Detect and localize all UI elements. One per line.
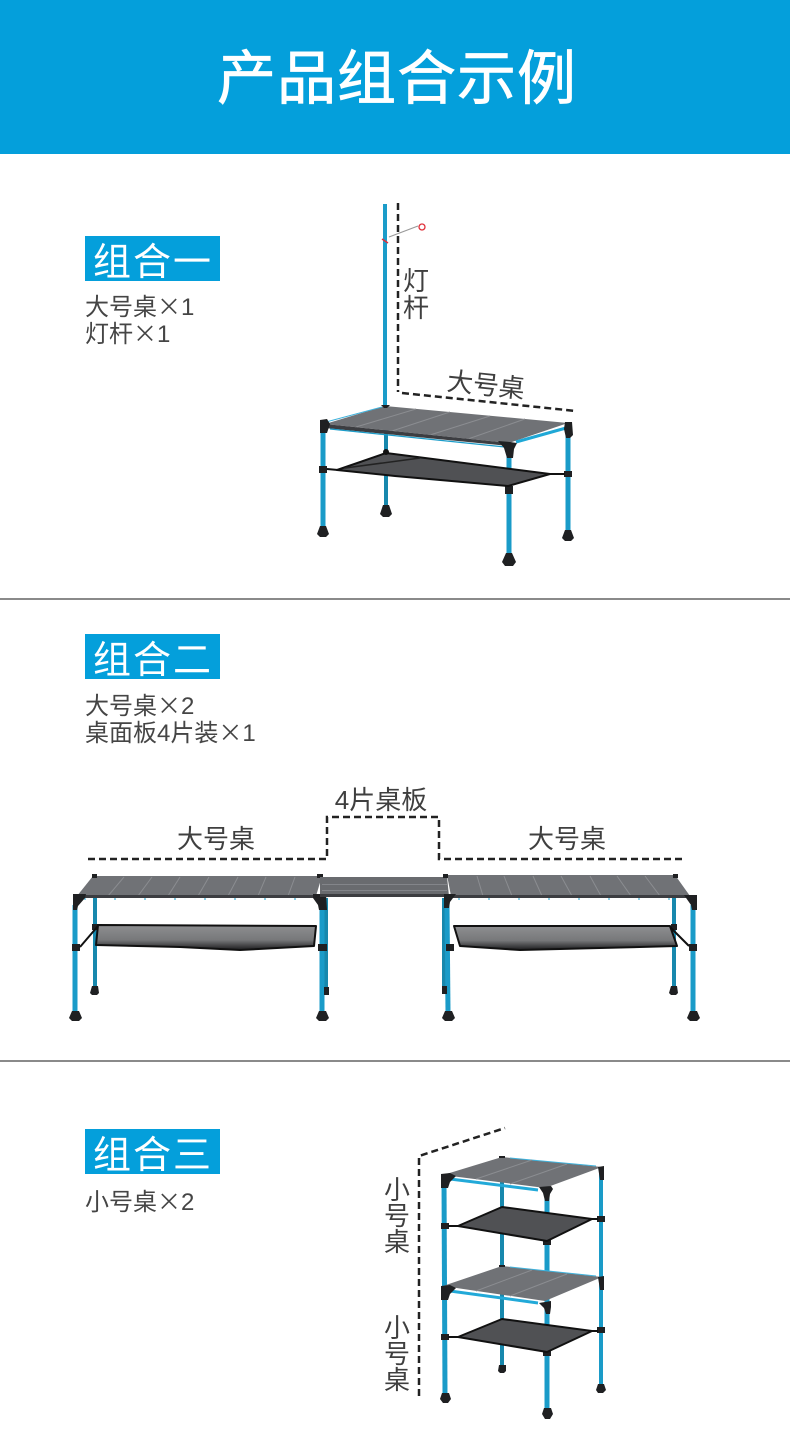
divider bbox=[0, 598, 790, 600]
dimension label: upper small table: 号 bbox=[384, 1201, 410, 1231]
table top bbox=[320, 405, 573, 458]
badge: combination one: 组合一 bbox=[93, 242, 213, 284]
dimension line: table bbox=[402, 393, 576, 411]
parts list: combination three: 小号桌 bbox=[85, 1189, 157, 1216]
lower table top bbox=[441, 1265, 604, 1314]
dimension label: pole: 杆 bbox=[403, 293, 429, 323]
title: 产品组合示例 bbox=[217, 46, 577, 112]
badge: combination two: 组合二 bbox=[93, 640, 213, 682]
parts list: combination two: 桌面板4片装 bbox=[85, 720, 218, 747]
dimension label: lower small table: 桌 bbox=[384, 1365, 410, 1395]
dimension label: table: 大号桌 bbox=[446, 366, 526, 404]
dimension label: upper small table: 小 bbox=[384, 1175, 410, 1205]
dimension line: combined tables bbox=[88, 817, 684, 859]
diagram: table with lamp pole bbox=[317, 203, 576, 566]
parts list: combination three: ×2 bbox=[157, 1182, 194, 1217]
legs bbox=[317, 430, 574, 566]
parts list: combination two: 大号桌 bbox=[85, 693, 157, 720]
header banner bbox=[0, 0, 790, 154]
lower mesh shelf bbox=[448, 1319, 598, 1352]
panel: combination three bbox=[85, 1128, 606, 1419]
parts list: combination one: 大号桌 bbox=[85, 294, 157, 321]
divider bbox=[0, 1060, 790, 1062]
dimension label: lower small table: 小 bbox=[384, 1313, 410, 1343]
panel: combination two bbox=[69, 634, 700, 1021]
dimension label: lower small table: 号 bbox=[384, 1339, 410, 1369]
parts list: combination two: ×2 bbox=[157, 686, 194, 721]
diagram: right large table bbox=[442, 874, 700, 1021]
mesh shelf bbox=[327, 449, 565, 486]
parts list: combination one: ×1 bbox=[133, 314, 170, 349]
dimension label: upper small table: 桌 bbox=[384, 1227, 410, 1257]
dimension label: pole: 灯 bbox=[403, 266, 429, 296]
dimension label: right table: 大号桌 bbox=[528, 824, 606, 854]
parts list: combination one: 灯杆 bbox=[85, 321, 133, 348]
center panel: four-piece table top bbox=[320, 877, 449, 897]
legs bbox=[440, 1170, 606, 1419]
dimension line: pole bbox=[397, 203, 399, 392]
dimension label: left table: 大号桌 bbox=[177, 824, 255, 854]
diagram: left large table bbox=[69, 874, 329, 1021]
parts list: combination two: ×1 bbox=[218, 713, 256, 748]
upper mesh shelf bbox=[448, 1207, 598, 1241]
badge: combination three: 组合三 bbox=[93, 1135, 213, 1177]
diagram: stacked small tables bbox=[440, 1156, 606, 1419]
upper table top bbox=[441, 1156, 604, 1201]
dimension label: four panels: 4片桌板 bbox=[335, 785, 427, 815]
panel: combination one bbox=[85, 203, 576, 566]
parts list: combination one: ×1 bbox=[157, 287, 194, 322]
dimension line: stacked height bbox=[419, 1128, 505, 1396]
lamp pole bbox=[382, 204, 425, 407]
